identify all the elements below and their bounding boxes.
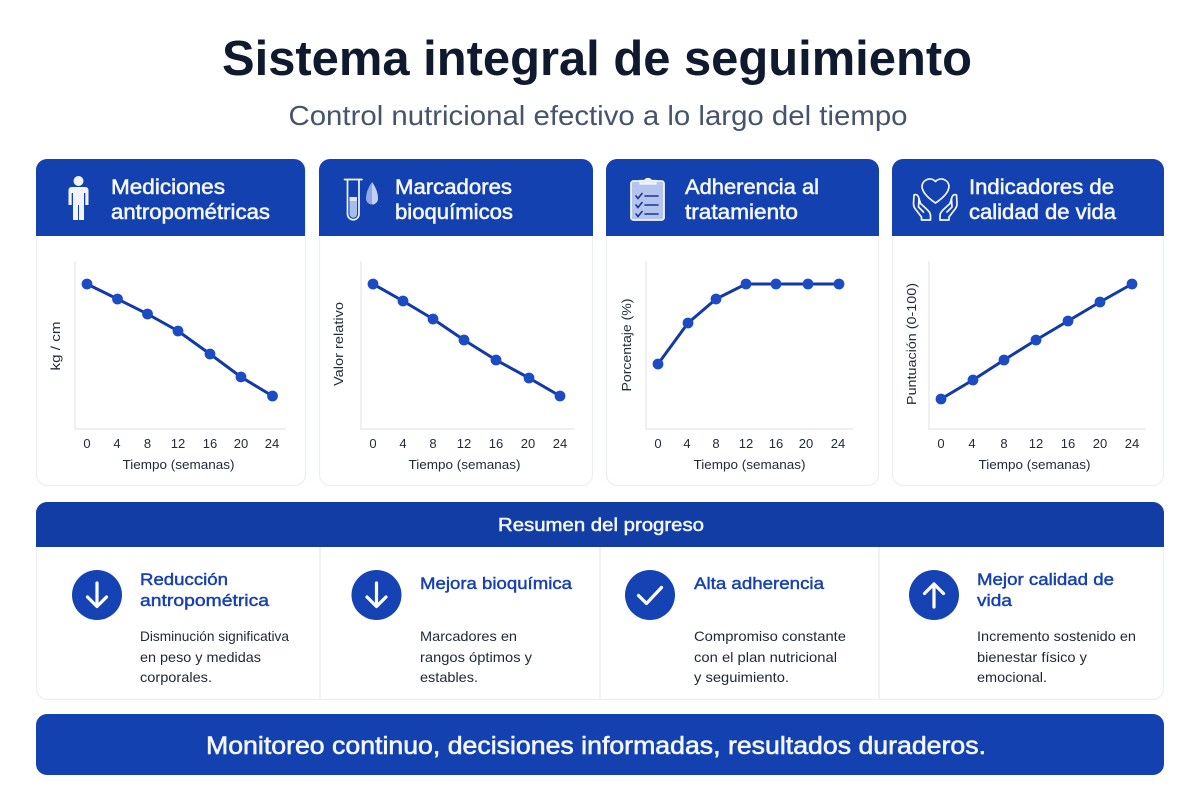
line chart: kg / cm	[49, 261, 286, 472]
panel: mediciones antropométricas: antropométricas	[111, 201, 270, 224]
line chart: kg / cm: 8	[144, 436, 151, 451]
panel: indicadores de calidad de vida	[892, 159, 1164, 486]
line chart: porcentaje: 0	[654, 436, 662, 451]
summary item: alta adherencia	[625, 570, 846, 685]
line chart: valor relativo: 20	[521, 436, 535, 451]
panel: marcadores bioquímicos: bioquímicos	[395, 201, 513, 224]
icon: person	[68, 176, 88, 220]
line chart: kg / cm: kg / cm	[49, 322, 63, 370]
summary item: alta adherencia: con el plan nutricional	[694, 649, 837, 665]
summary item: mejora bioquímica	[352, 570, 573, 685]
subtitle: Control nutricional efectivo a lo largo del tiempo	[288, 100, 908, 131]
line chart: porcentaje: 20	[799, 436, 813, 451]
footer banner: Monitoreo continuo, decisiones informadas, resultados duraderos.	[206, 732, 986, 760]
summary item: mejora bioquímica: rangos óptimos y	[420, 649, 532, 665]
summary item: alta adherencia: Alta adherencia	[694, 574, 825, 593]
line chart: valor relativo: 12	[457, 436, 471, 451]
title: Sistema integral de seguimiento	[222, 32, 972, 86]
panel: adherencia al tratamiento	[606, 159, 879, 486]
line chart: puntuación	[905, 261, 1146, 472]
panel: marcadores bioquímicos	[319, 159, 593, 486]
summary item: reducción antropométrica: Disminución significativa	[140, 628, 289, 644]
panel header: indicadores	[892, 159, 1164, 236]
icon: heart in hands	[914, 179, 957, 220]
summary item: reducción antropométrica	[72, 570, 289, 685]
line chart: valor relativo	[332, 261, 575, 472]
line chart: puntuación: Puntuación (0-100)	[905, 283, 919, 405]
panel header: marcadores	[319, 159, 593, 236]
line chart: puntuación: Tiempo (semanas)	[978, 458, 1090, 472]
summary item: mejora bioquímica: Mejora bioquímica	[420, 574, 573, 593]
summary item: reducción antropométrica: en peso y medidas	[140, 649, 261, 665]
summary header	[36, 502, 1164, 547]
line chart: kg / cm: 16	[203, 436, 217, 451]
line chart: porcentaje: 24	[831, 436, 845, 451]
line chart: puntuación: 20	[1093, 436, 1107, 451]
line chart: kg / cm: Tiempo (semanas)	[122, 458, 234, 472]
panel: resumen del progreso	[36, 502, 1164, 700]
summary heading: Resumen del progreso	[498, 515, 704, 535]
summary item: mejor calidad de vida: emocional.	[977, 669, 1047, 685]
heading: marcadores: Marcadores	[395, 176, 512, 199]
line chart: puntuación: 16	[1061, 436, 1075, 451]
line chart: porcentaje	[620, 261, 853, 472]
line chart: kg / cm: 12	[171, 436, 185, 451]
summary item: mejor calidad de vida: Mejor calidad de	[977, 570, 1114, 589]
panel header: adherencia	[606, 159, 879, 236]
summary item: mejor calidad de vida: vida	[977, 591, 1013, 610]
line chart: porcentaje: 16	[769, 436, 783, 451]
panel: adherencia al tratamiento: tratamiento	[685, 201, 798, 224]
panel: mediciones antropométricas	[36, 159, 306, 486]
footer banner	[36, 714, 1164, 775]
summary item: reducción antropométrica: corporales.	[140, 669, 212, 685]
line chart: kg / cm: 4	[113, 436, 121, 451]
summary item: mejora bioquímica: Marcadores en	[420, 628, 517, 644]
line chart: puntuación: 24	[1125, 436, 1139, 451]
panel header: mediciones	[36, 159, 305, 236]
summary item: reducción antropométrica: antropométrica	[140, 591, 270, 610]
line chart: valor relativo: 0	[369, 436, 377, 451]
icon: clipboard	[631, 178, 664, 220]
summary item: mejor calidad de vida	[909, 570, 1136, 685]
line chart: porcentaje: 12	[739, 436, 753, 451]
heading: adherencia: Adherencia al	[685, 176, 819, 199]
summary item: alta adherencia: y seguimiento.	[694, 669, 789, 685]
line chart: kg / cm: 0	[83, 436, 91, 451]
line chart: valor relativo: Valor relativo	[332, 302, 346, 386]
summary item: mejora bioquímica: estables.	[420, 669, 478, 685]
icon: check	[625, 570, 675, 620]
line chart: puntuación: 4	[968, 436, 976, 451]
line chart: porcentaje: 4	[683, 436, 691, 451]
summary item: mejor calidad de vida: bienestar físico y	[977, 649, 1087, 665]
line chart: porcentaje: Porcentaje (%)	[620, 298, 634, 392]
icon: down arrow	[72, 570, 122, 620]
line chart: valor relativo: 24	[553, 436, 567, 451]
heading: indicadores: Indicadores de	[969, 176, 1114, 199]
line chart: valor relativo: 8	[429, 436, 437, 451]
line chart: kg / cm: 24	[265, 436, 279, 451]
line chart: valor relativo: Tiempo (semanas)	[408, 458, 520, 472]
icon: up arrow	[909, 570, 959, 620]
line chart: puntuación: 0	[937, 436, 945, 451]
line chart: puntuación: 8	[1000, 436, 1008, 451]
line chart: valor relativo: 4	[399, 436, 407, 451]
line chart: porcentaje: Tiempo (semanas)	[694, 458, 806, 472]
icon: down arrow	[352, 570, 402, 620]
line chart: valor relativo: 16	[489, 436, 503, 451]
line chart: porcentaje: 8	[712, 436, 720, 451]
summary item: reducción antropométrica: Reducción	[140, 570, 228, 589]
summary item: alta adherencia: Compromiso constante	[694, 628, 846, 644]
heading: mediciones: Mediciones	[111, 176, 225, 199]
summary item: mejor calidad de vida: Incremento sostenido en	[977, 628, 1136, 644]
panel: indicadores de calidad de vida: calidad de vida	[969, 201, 1116, 224]
line chart: puntuación: 12	[1029, 436, 1043, 451]
line chart: kg / cm: 20	[234, 436, 248, 451]
icon: test tube and drop	[344, 180, 378, 220]
